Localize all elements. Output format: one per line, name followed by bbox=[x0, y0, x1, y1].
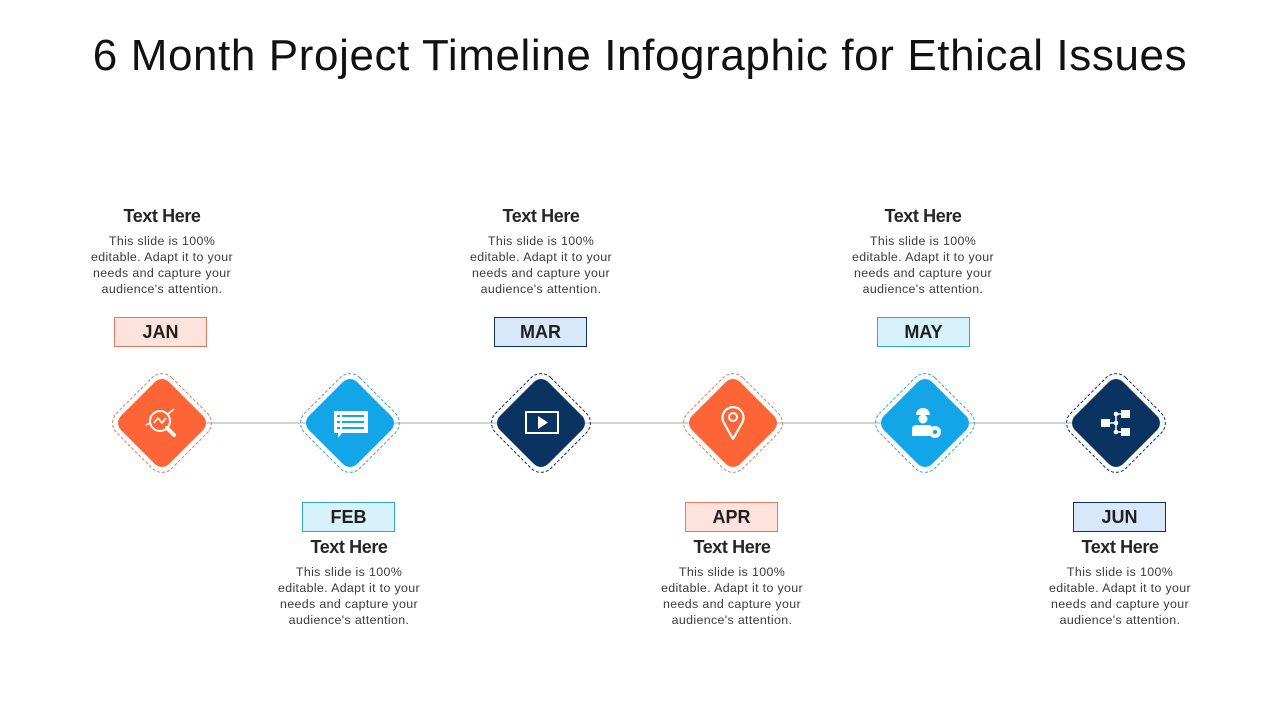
label: MAY: MAY bbox=[904, 322, 943, 342]
label: MAR: MAR bbox=[520, 322, 561, 342]
label: FEB: FEB bbox=[330, 507, 366, 527]
text block: JAN: This slide is 100% bbox=[109, 234, 215, 248]
text block: JAN: editable. Adapt it to your bbox=[91, 250, 233, 264]
text block: MAR bbox=[470, 206, 612, 296]
text block: FEB: needs and capture your bbox=[280, 597, 418, 611]
text block: MAY: needs and capture your bbox=[854, 266, 992, 280]
label: MAR bbox=[494, 317, 587, 347]
label: MAY bbox=[877, 317, 970, 347]
text block: MAY: audience's attention. bbox=[863, 282, 983, 296]
text block: FEB: This slide is 100% bbox=[296, 565, 402, 579]
icon: JUN diamond bbox=[1066, 373, 1166, 473]
text block: APR: Text Here bbox=[693, 537, 771, 557]
text block: JAN: needs and capture your bbox=[93, 266, 231, 280]
text block: JUN: Text Here bbox=[1081, 537, 1159, 557]
text block: FEB bbox=[278, 537, 420, 627]
text block: JUN: This slide is 100% bbox=[1067, 565, 1173, 579]
text block: MAY bbox=[852, 206, 994, 296]
text block: JAN bbox=[91, 206, 233, 296]
text block: APR: needs and capture your bbox=[663, 597, 801, 611]
text block: MAY: This slide is 100% bbox=[870, 234, 976, 248]
text block: MAR: audience's attention. bbox=[481, 282, 601, 296]
text block: MAR: This slide is 100% bbox=[488, 234, 594, 248]
label: APR bbox=[685, 502, 778, 532]
icon: MAY diamond bbox=[875, 373, 975, 473]
text block: JUN: needs and capture your bbox=[1051, 597, 1189, 611]
text block: MAY: Text Here bbox=[884, 206, 962, 226]
text block: APR: audience's attention. bbox=[672, 613, 792, 627]
text block: APR: editable. Adapt it to your bbox=[661, 581, 803, 595]
label: JAN: JAN bbox=[142, 322, 178, 342]
text block: FEB: editable. Adapt it to your bbox=[278, 581, 420, 595]
text block: FEB: audience's attention. bbox=[289, 613, 409, 627]
label: APR: APR bbox=[712, 507, 750, 527]
icon: FEB diamond bbox=[300, 373, 400, 473]
text block: JAN: Text Here bbox=[123, 206, 201, 226]
label: JUN: JUN bbox=[1101, 507, 1138, 527]
label: FEB bbox=[302, 502, 395, 532]
text block: MAR: editable. Adapt it to your bbox=[470, 250, 612, 264]
text block: MAR: Text Here bbox=[502, 206, 580, 226]
icon: JAN diamond bbox=[112, 373, 212, 473]
label: JAN bbox=[114, 317, 207, 347]
text block: JAN: audience's attention. bbox=[102, 282, 222, 296]
text block: APR bbox=[661, 537, 803, 627]
text block: APR: This slide is 100% bbox=[679, 565, 785, 579]
title: 6 Month Project Timeline Infographic for Ethical Issues bbox=[93, 31, 1187, 80]
text block: JUN: editable. Adapt it to your bbox=[1049, 581, 1191, 595]
icon: APR diamond bbox=[683, 373, 783, 473]
text block: MAY: editable. Adapt it to your bbox=[852, 250, 994, 264]
text block: JUN bbox=[1049, 537, 1191, 627]
text block: JUN: audience's attention. bbox=[1060, 613, 1180, 627]
icon: MAR diamond bbox=[491, 373, 591, 473]
text block: MAR: needs and capture your bbox=[472, 266, 610, 280]
label: JUN bbox=[1073, 502, 1166, 532]
text block: FEB: Text Here bbox=[310, 537, 388, 557]
